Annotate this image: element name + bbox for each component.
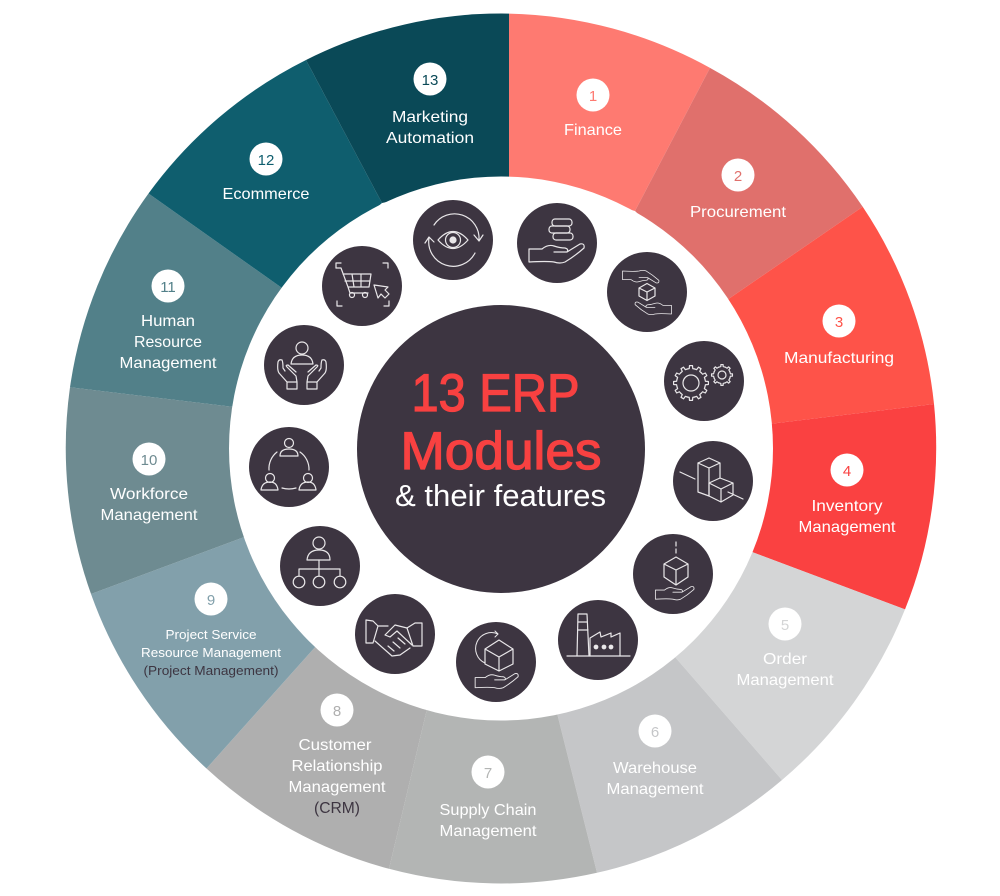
module 8: Customer Relationship Management (CRM): Relationship	[292, 758, 383, 775]
icon: coins over hand	[517, 203, 597, 283]
module 9: Project Service Resource Management	[141, 582, 281, 678]
module 2: Procurement: 2	[734, 168, 742, 185]
module 10: Workforce Management	[100, 442, 198, 524]
module 2: Procurement: Procurement	[690, 204, 787, 221]
module 13: Marketing Automation: 13	[422, 72, 438, 89]
module 12: Ecommerce: 12	[258, 152, 274, 169]
icon: shopping cart with cursor	[322, 246, 402, 326]
icon: hands exchanging box	[607, 252, 687, 332]
module 1: Finance	[564, 78, 622, 139]
module 6: Warehouse Management: 6	[651, 724, 659, 741]
module 9: Project Service Resource Management: Resource Management	[141, 645, 281, 660]
panel: central title disc	[357, 305, 645, 593]
module 1: Finance: 1	[589, 88, 597, 105]
module 5: Order Management: Management	[736, 672, 834, 689]
module 3: Manufacturing	[784, 304, 894, 367]
module 11: Human Resource Management: Human	[141, 313, 195, 330]
module 8: Customer Relationship Management (CRM): Customer	[298, 737, 372, 754]
module 5: Order Management	[736, 608, 834, 689]
module 7: Supply Chain Management: Supply Chain	[440, 802, 536, 819]
module 5: Order Management: 5	[781, 617, 789, 634]
module 1: Finance: Finance	[564, 122, 622, 139]
module 4: Inventory Management	[798, 454, 896, 536]
icon: gears	[664, 341, 744, 421]
module 10: Workforce Management: Workforce	[110, 486, 188, 503]
icon: box above hand	[633, 534, 713, 614]
icon: handshake	[355, 594, 435, 674]
module 9: Project Service Resource Management: 9	[207, 592, 215, 609]
title: Modules: Modules	[400, 422, 602, 481]
subtitle: & their features	[395, 478, 606, 513]
module 7: Supply Chain Management: Management	[440, 823, 537, 840]
module 9: Project Service Resource Management: Project Service	[166, 627, 256, 642]
icon: eye with cycle arrows	[413, 200, 493, 280]
module 8: Customer Relationship Management (CRM)	[288, 694, 386, 817]
module 8: Customer Relationship Management (CRM): 8	[333, 703, 341, 720]
module 13: Marketing Automation	[386, 62, 474, 147]
module 4: Inventory Management: 4	[843, 463, 851, 480]
module 12: Ecommerce	[222, 142, 310, 203]
module 13: Marketing Automation: Automation	[386, 130, 474, 147]
module 7: Supply Chain Management: 7	[484, 765, 492, 782]
icon: rotating cube over hand	[456, 622, 536, 702]
module 7: Supply Chain Management	[440, 756, 537, 840]
module 10: Workforce Management: Management	[100, 507, 198, 524]
module 3: Manufacturing: 3	[835, 314, 843, 331]
module 13: Marketing Automation: Marketing	[392, 109, 468, 126]
module 3: Manufacturing: Manufacturing	[784, 350, 894, 367]
icon: person in hands	[264, 325, 344, 405]
module 4: Inventory Management: Management	[798, 519, 896, 536]
icon: team circle	[249, 427, 329, 507]
module 11: Human Resource Management	[120, 270, 217, 372]
icon: stacked boxes on axis	[673, 441, 753, 521]
module 11: Human Resource Management: Resource	[134, 334, 202, 351]
module 5: Order Management: Order	[763, 651, 808, 668]
module 10: Workforce Management: 10	[141, 452, 157, 469]
module 11: Human Resource Management: 11	[160, 279, 176, 296]
module 6: Warehouse Management: Management	[606, 781, 704, 798]
module 11: Human Resource Management: Management	[120, 355, 217, 372]
module 9: Project Service Resource Management: (Project Management)	[144, 663, 278, 678]
module 8: Customer Relationship Management (CRM): Management	[288, 779, 386, 796]
module 2: Procurement	[690, 158, 787, 221]
title: 13 ERP: 13 ERP	[412, 364, 580, 423]
icon: org chart	[280, 526, 360, 606]
module 6: Warehouse Management	[606, 714, 704, 798]
module 8: Customer Relationship Management (CRM): (CRM)	[314, 800, 360, 817]
icon: factory	[558, 600, 638, 680]
module 6: Warehouse Management: Warehouse	[613, 760, 697, 777]
panel: inner white circle	[229, 176, 773, 720]
module 4: Inventory Management: Inventory	[812, 498, 882, 515]
module 12: Ecommerce: Ecommerce	[222, 186, 310, 203]
